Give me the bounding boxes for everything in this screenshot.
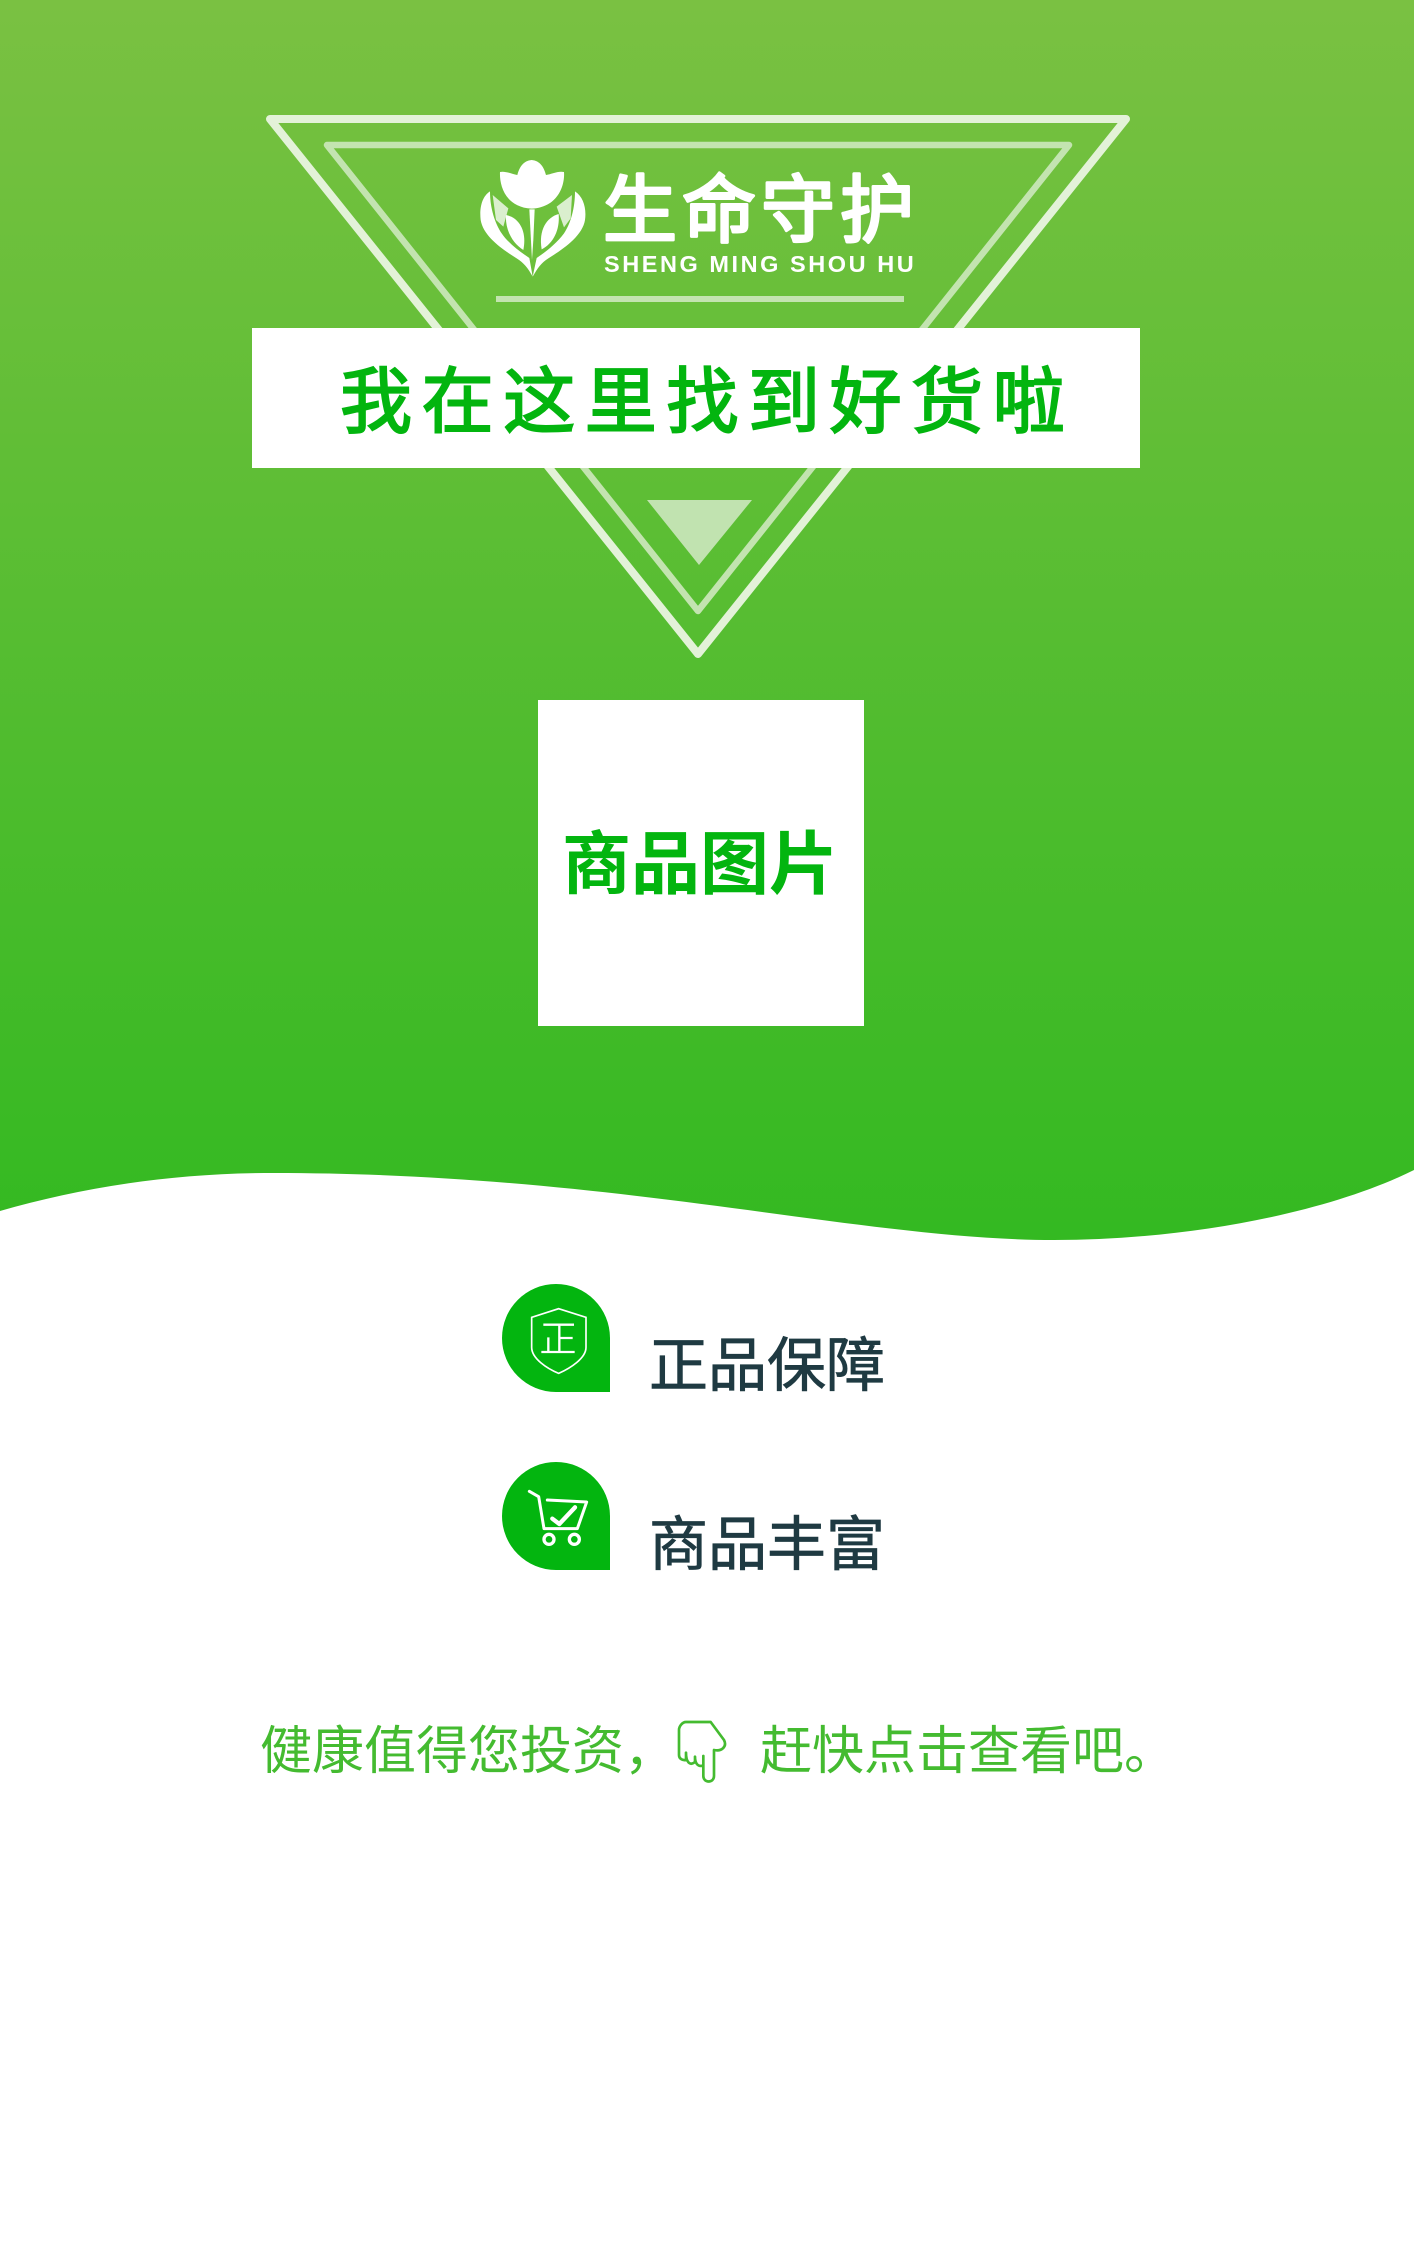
feature text: 商品丰富 [649, 1512, 885, 1578]
small triangle [647, 500, 752, 565]
feature: genuine guarantee [502, 1284, 885, 1399]
inner triangle outline [327, 145, 1069, 611]
call to action text right: 赶快点击查看吧。 [760, 1723, 1176, 1781]
feature text: 正品保障 [649, 1333, 885, 1399]
feature: rich goods [502, 1462, 885, 1578]
logo icon: tulip in hands [480, 160, 585, 277]
logo pinyin: SHENG MING SHOU HU [604, 251, 916, 277]
green wave background [0, 0, 1414, 1240]
outer triangle outline [270, 119, 1126, 654]
logo underline [496, 296, 904, 302]
icon: pointing hand [679, 1722, 725, 1781]
call to action text left: 健康值得您投资， [260, 1723, 676, 1781]
call to action [260, 1722, 1176, 1781]
logo wordmark: 生命守护 [603, 169, 919, 252]
placeholder box [538, 700, 864, 1026]
product image placeholder [538, 700, 864, 1026]
banner text: 我在这里找到好货啦 [340, 363, 1074, 443]
icon: shield badge [502, 1284, 610, 1392]
banner background [252, 328, 1140, 468]
logo: 生命守护 [480, 160, 919, 277]
slogan banner [252, 328, 1140, 468]
icon: shopping cart [502, 1462, 610, 1570]
placeholder label: 商品图片 [562, 826, 838, 903]
